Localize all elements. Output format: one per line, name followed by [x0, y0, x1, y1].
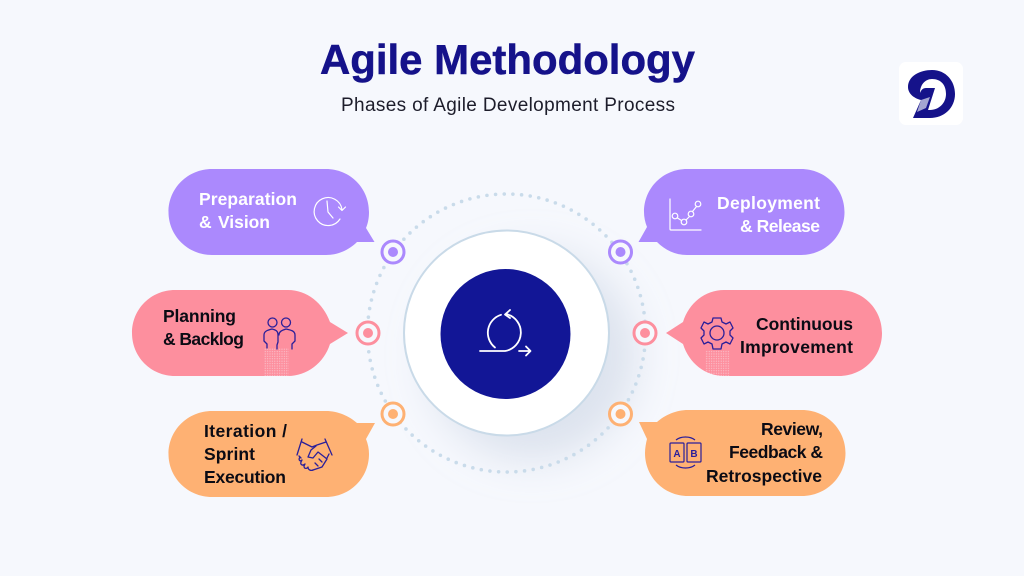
node: pink right	[634, 322, 656, 344]
node: orange right	[610, 403, 632, 425]
halftone patch	[264, 348, 289, 376]
icon: handshake	[297, 439, 332, 470]
bubble: Preparation & Vision: Vision	[218, 212, 270, 232]
subtitle: Phases of Agile Development Process	[341, 95, 675, 116]
bubble: Deployment & Release	[638, 169, 844, 255]
bubble: Preparation & Vision: &	[199, 212, 212, 232]
bubble: Iteration / Sprint Execution: Iteration /	[204, 421, 287, 441]
bubble: Planning & Backlog: & Backlog	[163, 329, 244, 349]
node: orange left	[382, 403, 404, 425]
navy circle	[440, 269, 570, 399]
node: pink left	[357, 322, 379, 344]
bubble: Iteration / Sprint Execution: Execution	[204, 467, 286, 487]
bubble: Review, Feedback & Retrospective	[639, 410, 846, 496]
bubble: Deployment & Release: Deployment	[717, 193, 820, 213]
bubble: Continuous Improvement: Improvement	[740, 337, 853, 357]
icon: A/B swap	[670, 437, 701, 468]
bubble: Planning & Backlog	[132, 290, 348, 376]
icon: A/B swap: B	[690, 449, 698, 460]
icon: agile loop	[480, 310, 530, 356]
node: purple right	[610, 241, 632, 263]
central hub	[368, 194, 646, 472]
bubble: Continuous Improvement: Continuous	[756, 314, 853, 334]
icon: gear	[701, 318, 733, 349]
title: Agile Methodology	[320, 36, 696, 83]
bubble: Planning & Backlog: Planning	[163, 306, 236, 326]
bubble: Preparation & Vision: Preparation	[199, 189, 297, 209]
icon: clock	[314, 198, 346, 226]
bubble: Review, Feedback & Retrospective: Feedback &	[729, 442, 823, 462]
white circle	[404, 230, 609, 436]
logo	[899, 62, 963, 125]
bubble: Deployment & Release: & Release	[740, 216, 820, 236]
icon: two people	[264, 318, 295, 349]
hub shadow	[428, 252, 636, 460]
bubble: Review, Feedback & Retrospective: Review,	[761, 419, 823, 439]
bubble: Continuous Improvement	[666, 290, 882, 376]
dotted ring	[368, 194, 646, 472]
bubble: Iteration / Sprint Execution: Sprint	[204, 444, 255, 464]
icon: A/B swap: A	[673, 449, 681, 460]
bubble: Preparation & Vision	[168, 169, 374, 255]
bubble: Review, Feedback & Retrospective: Retrospective	[706, 466, 822, 486]
node: purple left	[382, 241, 404, 263]
icon: line chart	[670, 199, 701, 230]
bubble: Iteration / Sprint Execution	[168, 411, 375, 497]
halftone patch	[705, 350, 730, 376]
